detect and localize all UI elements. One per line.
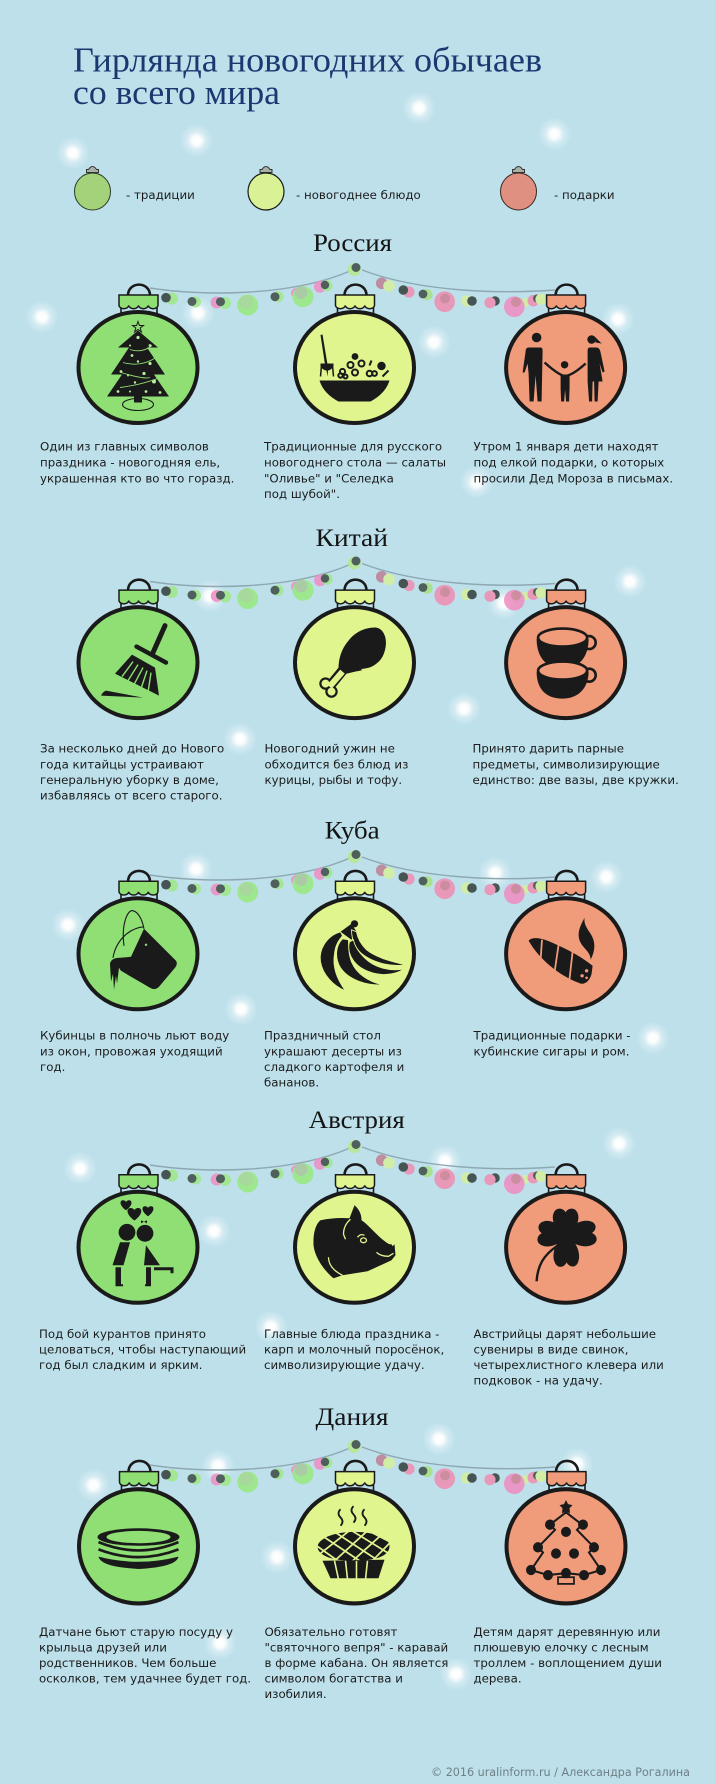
- text: Куба, блюдо: украшают десерты из: [264, 1044, 402, 1058]
- text: Россия, подарки: просили Дед Мороза в письмах.: [474, 471, 673, 485]
- text: Китай, традиции: избавляясь от всего старого.: [40, 789, 222, 803]
- ornament: ведро: [78, 871, 198, 1009]
- text: Китай, традиции: года китайцы устраивают: [40, 757, 204, 771]
- text: Россия, блюдо: Традиционные для русского: [263, 440, 442, 454]
- text: Дания, традиции: осколков, тем удачнее будет год.: [39, 1672, 251, 1686]
- text: Дания, блюдо: "святочного вепря" - каравай: [264, 1640, 448, 1654]
- text: Австрия, подарки: Австрийцы дарят небольшие: [474, 1327, 656, 1341]
- ornament: поцелуй: [78, 1164, 198, 1303]
- text: Россия, традиции: украшенная кто во что горазд.: [40, 471, 234, 485]
- text: Австрия, традиции: год был сладким и ярким.: [39, 1358, 202, 1372]
- footer credit: © 2016 uralinform.ru / Александра Рогалина: [431, 1765, 690, 1779]
- text: Куба, подарки: кубинские сигары и ром.: [474, 1044, 629, 1058]
- ornament: поросёнок: [295, 1164, 414, 1303]
- text: Россия, подарки: Утром 1 января дети находят: [474, 440, 659, 454]
- text: Китай, блюдо: курицы, рыбы и тофу.: [264, 773, 402, 787]
- ornament: семья: [506, 285, 625, 423]
- heading: Россия: Россия: [313, 230, 393, 257]
- heading: Дания: Дания: [316, 1404, 389, 1431]
- ornament: куриная ножка: [295, 580, 414, 718]
- heading: Австрия: Австрия: [309, 1107, 405, 1134]
- text: Дания, блюдо: Обязательно готовят: [264, 1625, 398, 1639]
- ornament: клевер: [506, 1164, 625, 1303]
- ornament: сигара: [506, 871, 625, 1009]
- ornament: веник: [78, 580, 198, 718]
- text: Дания, подарки: дерева.: [474, 1672, 522, 1686]
- text: Дания, традиции: Датчане бьют старую посуду у: [39, 1625, 233, 1639]
- text: Китай, подарки: единство: две вазы, две кружки.: [472, 773, 679, 787]
- text: Австрия, подарки: сувениры в виде свинок,: [474, 1342, 629, 1356]
- text: Дания, подарки: плюшевую елочку с лесным: [474, 1640, 649, 1654]
- text: Китай, подарки: Принято дарить парные: [472, 742, 624, 756]
- legend label: gifts: - подарки: [554, 188, 615, 202]
- text: Куба, блюдо: Праздничный стол: [264, 1029, 381, 1043]
- heading: Китай: Китай: [316, 525, 388, 552]
- text: Дания, блюдо: символом богатства и: [264, 1672, 403, 1686]
- text: Австрия, блюдо: карп и молочный поросёнок,: [264, 1342, 444, 1356]
- ornament: бананы: [295, 871, 414, 1009]
- ornament: чашки: [506, 580, 625, 718]
- text: Россия, традиции: праздника - новогодняя ель,: [40, 456, 220, 470]
- garland: Куба: [150, 850, 555, 904]
- text: Дания, традиции: родственников. Чем больше: [39, 1656, 216, 1670]
- text: Куба, традиции: из окон, провожая уходящий: [40, 1044, 223, 1058]
- text: Дания, подарки: Детям дарят деревянную или: [474, 1625, 660, 1639]
- legend label: dish: - новогоднее блюдо: [296, 188, 421, 202]
- text: Австрия, подарки: четырехлистного клевера или: [474, 1358, 664, 1372]
- ornament: тарелки: [79, 1461, 198, 1603]
- text: Россия, традиции: Один из главных символов: [40, 440, 209, 454]
- text: Куба, традиции: Кубинцы в полночь льют воду: [40, 1029, 229, 1043]
- text: Китай, подарки: предметы, символизирующие: [472, 757, 660, 771]
- text: Дания, блюдо: изобилия.: [264, 1687, 327, 1701]
- text: Австрия, блюдо: символизирующие удачу.: [264, 1358, 425, 1372]
- text: Австрия, традиции: целоваться, чтобы наступающий: [39, 1342, 246, 1356]
- legend label: traditions: - традиции: [126, 188, 195, 202]
- text: Дания, подарки: троллем - воплощением души: [474, 1656, 662, 1670]
- text: Китай, блюдо: Новогодний ужин не: [264, 742, 395, 756]
- text: Китай, традиции: За несколько дней до Нового: [40, 742, 224, 756]
- text: Куба, традиции: год.: [40, 1060, 65, 1074]
- title: Гирлянда новогодних обычаев: [73, 40, 542, 80]
- garland: Австрия: [150, 1140, 555, 1194]
- ornament: ёлка: [78, 285, 198, 423]
- text: Австрия, блюдо: Главные блюда праздника -: [264, 1327, 439, 1341]
- text: Дания, блюдо: в форме кабана. Он является: [264, 1656, 448, 1670]
- title: со всего мира: [73, 73, 280, 112]
- ornament: деревянная ёлка: [506, 1461, 626, 1603]
- text: Китай, блюдо: обходится без блюд из: [264, 757, 408, 771]
- text: Россия, подарки: под елкой подарки, о которых: [474, 456, 664, 470]
- legend ornament: dish: [248, 166, 284, 210]
- text: Россия, блюдо: новогоднего стола — салаты: [264, 456, 446, 470]
- garland: Россия: [150, 263, 555, 317]
- text: Куба, блюдо: сладкого картофеля и: [264, 1060, 404, 1074]
- legend: [74, 166, 615, 210]
- garland: Китай: [150, 556, 555, 610]
- text: Россия, блюдо: под шубой".: [264, 487, 340, 501]
- text: Куба, подарки: Традиционные подарки -: [472, 1029, 631, 1043]
- garland: Дания: [150, 1440, 555, 1494]
- text: Куба, блюдо: бананов.: [264, 1076, 319, 1090]
- ornament: пирог: [295, 1461, 414, 1603]
- legend ornament: gifts: [500, 166, 536, 210]
- text: Австрия, подарки: подковок - на удачу.: [474, 1374, 603, 1388]
- heading: Куба: Куба: [325, 818, 380, 845]
- ornament: салат: [295, 285, 414, 423]
- text: Австрия, традиции: Под бой курантов принято: [39, 1327, 206, 1341]
- legend ornament: traditions: [74, 166, 110, 210]
- text: Китай, традиции: генеральную уборку в доме,: [40, 773, 219, 787]
- text: Дания, традиции: крыльца друзей или: [39, 1640, 167, 1654]
- text: Россия, блюдо: "Оливье" и "Селедка: [264, 471, 394, 485]
